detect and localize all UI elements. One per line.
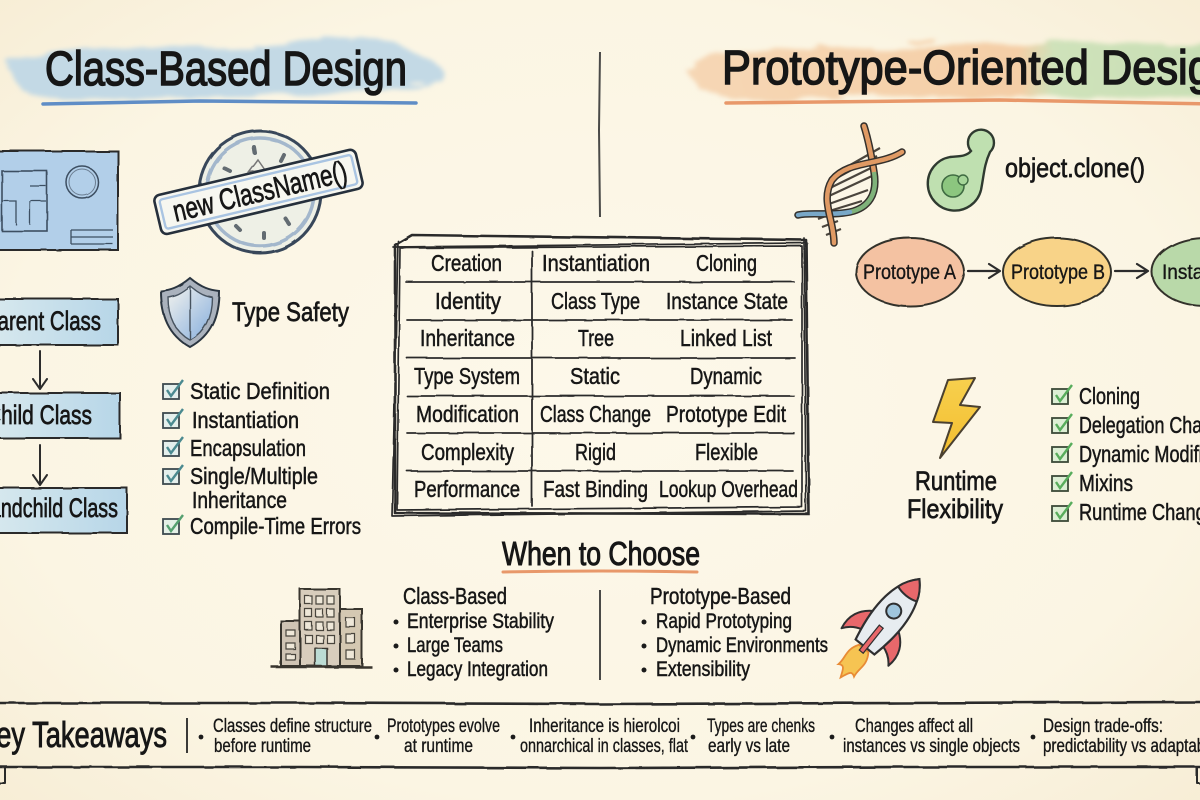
row: modification: Modification [416, 401, 519, 427]
takeaway 5: instances vs single objects [843, 736, 1020, 757]
checklist: prototype features [1052, 383, 1200, 525]
icon: blueprint [0, 151, 118, 250]
check item: cloning [1052, 383, 1140, 409]
node: prototype A [856, 238, 964, 306]
column: class-based: Legacy Integration [407, 658, 548, 681]
takeaway 3: Inheritance is hierolcoi [529, 716, 680, 737]
row: complexity: Flexible [695, 439, 758, 465]
row: inheritance: Linked List [680, 325, 773, 351]
icon: shield [161, 278, 219, 347]
check item: instantiation [163, 407, 299, 433]
comparison table [392, 235, 809, 516]
box: grandchild class [0, 488, 127, 533]
takeaway 6: Design trade-offs: [1043, 716, 1163, 737]
heading: class-based design: Class-Based Design [45, 43, 407, 96]
check item: mixins [1052, 470, 1133, 496]
row: creation: Creation [431, 250, 502, 276]
row: modification: Prototype Edit [666, 401, 787, 427]
check item: single/multiple inheritance [163, 463, 318, 513]
column: prototype-based: Rapid Prototyping [656, 610, 792, 633]
row: performance: Fast Binding [543, 476, 648, 502]
panel: prototype-oriented design [686, 42, 1200, 525]
takeaway 6 [1031, 716, 1200, 757]
label: runtime flexibility [907, 466, 1003, 524]
check item: mixins: Mixins [1079, 470, 1133, 496]
row: complexity [421, 439, 758, 465]
check item: static definition: Static Definition [190, 378, 330, 404]
table frame and grid [392, 235, 809, 516]
arrow: B to instance [1115, 264, 1148, 278]
column: prototype-based: Prototype-Based [650, 583, 791, 609]
row: type system: Static [570, 363, 620, 389]
column: class-based: Enterprise Stability [407, 610, 554, 633]
prototype chain [856, 238, 1200, 306]
banner: key takeaways [0, 702, 1200, 783]
takeaway 1: Classes define structure [213, 716, 372, 737]
heading: when to choose: When to Choose [502, 535, 700, 572]
icon: lightning bolt [933, 378, 980, 458]
check item: compile-time errors: Compile-Time Errors [190, 513, 361, 539]
checklist: class-based features [163, 378, 361, 539]
row: performance [414, 476, 798, 502]
row: creation [431, 250, 757, 276]
check item: single/multiple inheritance: Single/Multiple [190, 463, 318, 489]
row: performance: Lookup Overhead [659, 476, 798, 502]
node: prototype B: Prototype B [1011, 261, 1105, 284]
row: identity: Identity [435, 288, 501, 314]
row: type system: Dynamic [690, 363, 762, 389]
arrow: parent to child [33, 351, 47, 389]
column: prototype-based: Dynamic Environments [656, 634, 828, 657]
row: type system [414, 363, 762, 389]
column: class-based [394, 583, 554, 681]
row: performance: Performance [414, 476, 520, 502]
banner frame [0, 702, 1200, 783]
row: creation: Cloning [696, 250, 757, 276]
row: identity [435, 288, 788, 314]
takeaway 2: at runtime [404, 736, 473, 757]
takeaway 4: early vs late [708, 736, 790, 757]
hierarchy: parent, child, grandchild classes [0, 299, 127, 533]
takeaway 1: before runtime [214, 736, 311, 757]
row: identity: Class Type [551, 288, 640, 314]
takeaway 4 [691, 716, 815, 757]
takeaway 5 [830, 716, 1020, 757]
check item: encapsulation [163, 435, 306, 461]
icon: DNA helix [798, 126, 902, 243]
column: prototype-based: Extensibility [656, 658, 750, 681]
takeaway 2: Prototypes evolve [387, 716, 500, 737]
box: parent class [0, 299, 118, 345]
divider: banner label [186, 718, 188, 753]
check item: encapsulation: Encapsulation [190, 435, 306, 461]
takeaway 1 [199, 716, 372, 757]
arrow: child to grandchild [33, 445, 47, 485]
column: class-based: Large Teams [407, 634, 503, 657]
row: inheritance: Tree [578, 325, 614, 351]
label: runtime flexibility: Flexibility [907, 494, 1003, 524]
row: modification: Class Change [540, 401, 651, 427]
section: when to choose [271, 535, 943, 697]
row: modification [416, 401, 787, 427]
icon: cloning cell [928, 130, 994, 211]
label: type safety: Type Safety [232, 297, 349, 327]
icon: office building [271, 589, 372, 667]
panel: class-based design [0, 40, 446, 539]
box: child class [0, 393, 120, 438]
takeaway 3 [511, 716, 689, 757]
row: creation: Instantiation [542, 250, 650, 276]
column: class-based: Class-Based [403, 583, 507, 609]
check item: single/multiple inheritance: Inheritance [192, 487, 287, 513]
check item: instantiation: Instantiation [192, 407, 299, 433]
takeaway 3: onnarchical in classes, flat [520, 736, 689, 757]
takeaway 2 [375, 716, 500, 757]
row: type system: Type System [414, 363, 520, 389]
takeaway 4: Types are chenks [707, 716, 815, 737]
arrow: A to B [968, 264, 1000, 278]
node: prototype A: Prototype A [863, 261, 956, 284]
icon: class stamp with new ClassName(): new ClassName() [170, 155, 350, 229]
row: inheritance: Inheritance [420, 325, 515, 351]
label: object.clone(): object.clone() [1005, 153, 1145, 183]
takeaway 5: Changes affect all [855, 716, 973, 737]
column: prototype-based [642, 583, 828, 681]
row: inheritance [420, 325, 773, 351]
label: runtime flexibility: Runtime [915, 466, 997, 496]
center divider [599, 52, 600, 217]
node: prototype B [1003, 238, 1111, 306]
row: complexity: Complexity [421, 439, 514, 465]
check item: cloning: Cloning [1079, 383, 1140, 409]
divider: class vs prototype [599, 590, 601, 680]
row: identity: Instance State [666, 288, 788, 314]
node: instance [1152, 238, 1200, 306]
row: complexity: Rigid [575, 439, 616, 465]
icon: rocket [817, 560, 943, 697]
icon: class stamp with new ClassName() [153, 131, 364, 253]
